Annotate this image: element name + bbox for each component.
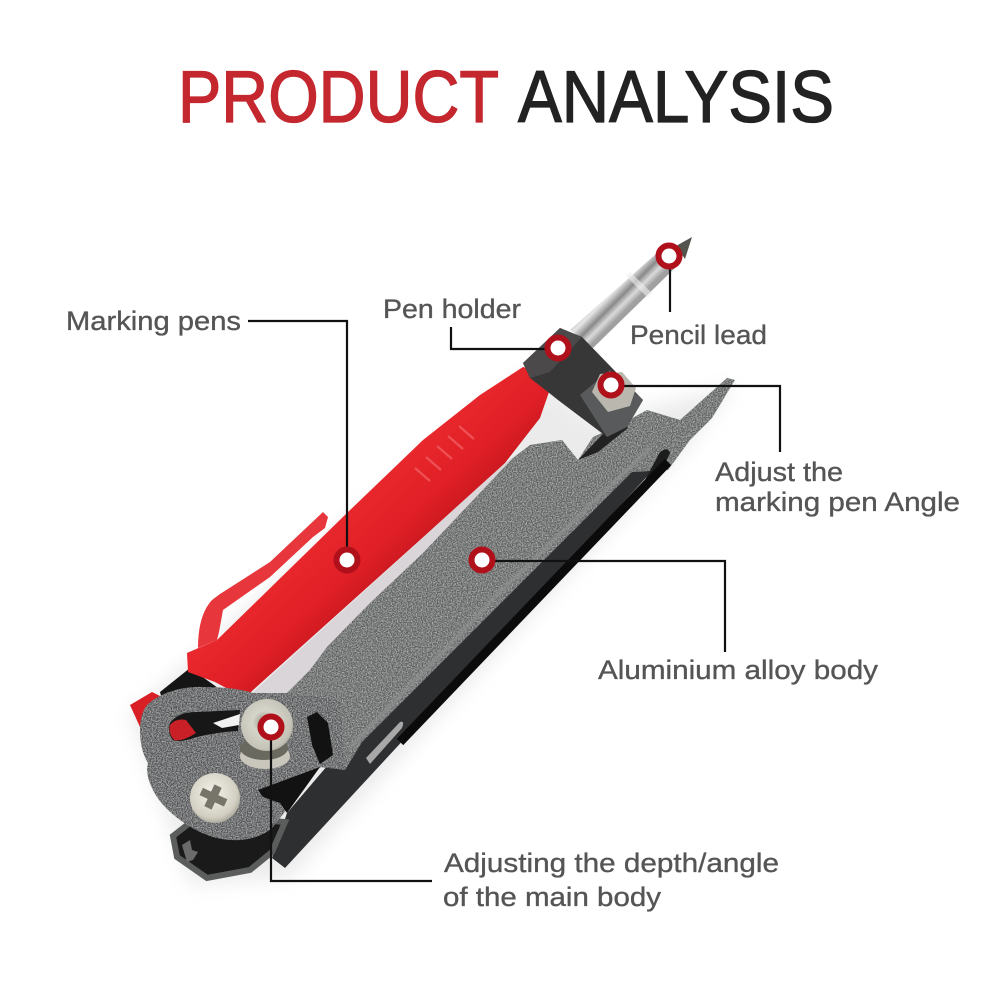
main face <box>280 378 735 780</box>
marker dots <box>260 246 680 738</box>
title <box>178 57 834 138</box>
black pen section <box>160 668 232 730</box>
label: adjusting depth and angle <box>443 848 779 912</box>
title: ANALYSIS <box>518 57 834 138</box>
label: adjusting depth and angle: of the main body <box>443 882 662 912</box>
pen holder bracket <box>523 328 643 437</box>
label: adjusting depth and angle: Adjusting the depth/angle <box>444 848 779 878</box>
label: pen holder: Pen holder <box>383 294 521 324</box>
adjustment nut <box>592 372 636 412</box>
pencil lead tube <box>570 237 692 348</box>
thumb knob <box>240 699 293 769</box>
pen clip <box>198 512 328 648</box>
label: adjust marking pen angle <box>715 457 960 517</box>
label: adjust marking pen angle: Adjust the <box>715 457 843 487</box>
highlight fold on face <box>350 448 650 748</box>
pivot plate front <box>140 687 345 862</box>
red pen tail <box>130 692 168 727</box>
long dark groove <box>400 462 668 742</box>
lower side slot <box>366 722 403 764</box>
light back plate between pen and body <box>250 445 530 697</box>
rear pivot plate <box>173 815 285 878</box>
label: pencil lead: Pencil lead <box>630 320 767 350</box>
upper slot <box>645 449 670 480</box>
label: marking pens: Marking pens <box>66 306 241 336</box>
right slot <box>307 712 333 764</box>
leader lines <box>248 256 780 881</box>
grey aluminium body <box>272 378 735 868</box>
label: adjust marking pen angle: marking pen Angle <box>715 487 960 517</box>
dark side wall <box>272 428 692 868</box>
phillips screw <box>190 773 240 823</box>
grip ridges <box>415 426 474 481</box>
title: PRODUCT <box>178 57 499 138</box>
product photo: marking tool <box>130 237 735 885</box>
rear slot mark <box>182 840 198 862</box>
label: aluminium alloy body: Aluminium alloy body <box>598 655 879 685</box>
red marking pen <box>130 367 549 730</box>
curved slot <box>169 710 240 741</box>
soft drop shadow <box>130 370 735 885</box>
pen barrel <box>187 367 549 698</box>
